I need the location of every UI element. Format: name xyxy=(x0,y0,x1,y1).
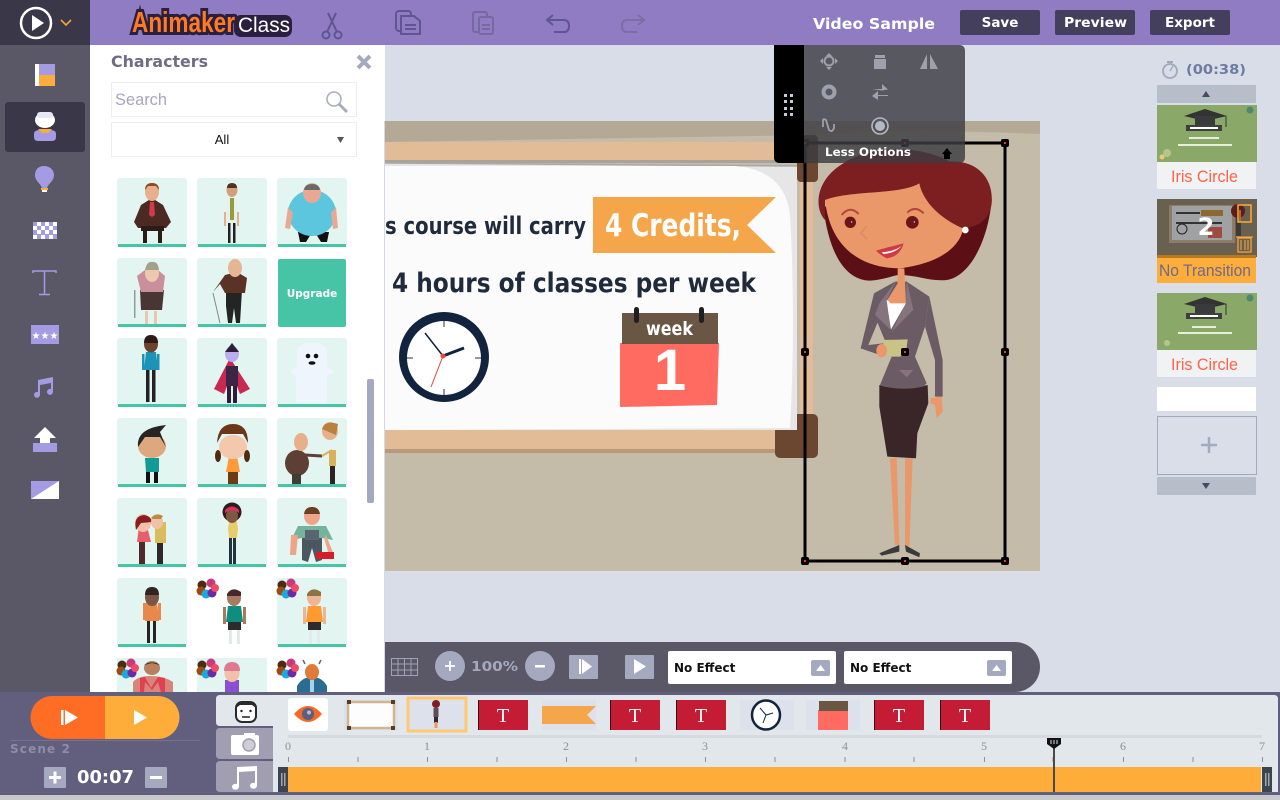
calendar: week xyxy=(646,318,693,340)
icon: collapse arrow xyxy=(942,148,952,159)
time ruler: 7 xyxy=(1259,739,1265,753)
scene label: Scene 2 xyxy=(10,742,70,756)
scroll down xyxy=(1157,477,1256,495)
icon: flip xyxy=(920,54,938,69)
icon: settings xyxy=(824,86,834,98)
clock xyxy=(399,312,489,402)
scene thumbnail 1: Iris Circle xyxy=(1171,168,1238,186)
time ruler: 5 xyxy=(981,739,987,753)
empty transition slot xyxy=(1157,387,1256,411)
duration control: 00:07 xyxy=(77,767,134,788)
character: boy in blue hoodie xyxy=(142,335,160,402)
icon: upload xyxy=(33,427,57,452)
icon: record xyxy=(872,118,888,134)
time ruler: 2 xyxy=(563,739,569,753)
duration control xyxy=(44,767,167,788)
orange ribbon: 4 Credits, xyxy=(605,208,741,244)
track item: text: T xyxy=(695,705,707,727)
total duration xyxy=(1163,61,1246,78)
save button xyxy=(960,10,1040,35)
character: man in brown suit xyxy=(134,183,171,243)
scene thumbnail 3: Iris Circle xyxy=(1171,356,1238,374)
character: large man in blue shirt xyxy=(285,183,338,242)
upgrade card xyxy=(278,259,346,327)
premium badges xyxy=(116,578,299,678)
character: girl with purple top xyxy=(224,662,240,692)
exit effect dropdown xyxy=(844,651,1012,684)
calendar xyxy=(620,307,719,407)
characters library panel xyxy=(90,45,385,692)
icon: characters xyxy=(34,112,56,141)
play button xyxy=(625,655,654,679)
icon: stars xyxy=(31,325,59,344)
canvas control bar xyxy=(385,642,1040,692)
Animaker Class logo: Animaker xyxy=(132,7,235,39)
export button xyxy=(1150,10,1230,35)
icon: swap xyxy=(872,84,888,100)
character: man in orange shirt xyxy=(143,587,161,643)
panel scrollbar xyxy=(367,379,374,503)
character: tall thin man xyxy=(224,183,239,243)
scene thumbnail 2 (active): No Transition xyxy=(1159,262,1251,280)
top bar xyxy=(0,0,1280,45)
close icon xyxy=(358,56,370,68)
object options toolbar xyxy=(774,45,965,163)
icon: delete xyxy=(874,55,886,69)
character: couple xyxy=(135,514,166,564)
export button: Export xyxy=(1165,15,1216,31)
time ruler: 1 xyxy=(424,739,430,753)
character: wrestler xyxy=(133,661,173,692)
icon: grid xyxy=(392,658,418,676)
character: woman with headband xyxy=(222,502,242,564)
icon: undo xyxy=(547,15,569,32)
white board xyxy=(385,163,797,430)
preview button: Preview xyxy=(1064,15,1127,31)
icon: redo xyxy=(622,15,644,32)
search box: Search xyxy=(115,91,167,109)
time ruler xyxy=(285,735,1265,762)
character: old man with cane xyxy=(213,259,247,323)
scene duration bar xyxy=(278,767,1272,792)
calendar: 1 xyxy=(654,338,686,403)
upgrade card: Upgrade xyxy=(287,288,337,300)
character: old woman xyxy=(134,262,165,324)
track item: ribbon xyxy=(542,700,596,730)
track item: text xyxy=(610,700,660,730)
character: mechanic with toolbox xyxy=(290,507,334,562)
zoom out button xyxy=(525,651,555,681)
play controls pill xyxy=(30,696,180,739)
panel heading: Characters xyxy=(111,52,208,71)
play scene button xyxy=(569,655,598,679)
enter effect dropdown: No Effect xyxy=(674,661,736,675)
preview button xyxy=(1055,10,1135,35)
track item: text xyxy=(874,700,924,730)
track item: text: T xyxy=(893,705,905,727)
category dropdown xyxy=(112,122,356,156)
zoom level: 100% xyxy=(471,659,519,675)
time ruler: 4 xyxy=(842,739,848,753)
track item: text: T xyxy=(497,705,509,727)
zoom in button xyxy=(435,651,465,681)
icon: effects checker xyxy=(33,222,57,239)
icon: text xyxy=(33,271,56,294)
character: vampire xyxy=(214,343,250,403)
track item: text: T xyxy=(629,705,641,727)
drag grip xyxy=(784,94,793,116)
total duration: (00:38) xyxy=(1186,62,1246,78)
character: fox in suit xyxy=(297,660,327,692)
scroll up xyxy=(1157,85,1256,103)
enter effect dropdown xyxy=(668,651,836,684)
icon: backgrounds xyxy=(35,64,55,86)
time ruler: 0 xyxy=(285,739,291,753)
video canvas scene xyxy=(385,121,1040,571)
time ruler: 3 xyxy=(702,739,708,753)
icon: move xyxy=(820,53,838,70)
icon: props bulb xyxy=(35,166,54,192)
category dropdown: All xyxy=(215,132,229,147)
timeline panel xyxy=(273,695,1278,792)
track item: board xyxy=(344,700,398,730)
character: green shirt runner xyxy=(223,589,246,644)
character: boy with spiky hair xyxy=(138,425,166,483)
time ruler: 6 xyxy=(1120,739,1126,753)
icon: stars: ★★★ xyxy=(32,331,58,342)
search box xyxy=(112,82,356,116)
icon: face tab xyxy=(236,701,256,722)
save button: Save xyxy=(982,15,1018,31)
timeline tabs xyxy=(216,695,273,792)
less options label: Less Options xyxy=(825,145,911,159)
character: orange shirt runner xyxy=(303,589,326,644)
scene thumbnail 3 xyxy=(1157,293,1257,377)
bottom timeline strip xyxy=(0,692,1280,800)
board heading: hours per week: 4 hours of classes per week xyxy=(392,268,757,299)
track item: calendar xyxy=(806,700,860,730)
track item: text xyxy=(676,700,726,730)
character cards xyxy=(117,178,347,692)
exit effect dropdown: No Effect xyxy=(850,661,912,675)
scene thumbnail 1 xyxy=(1157,105,1257,189)
board heading: course credits: s course will carry xyxy=(385,212,586,240)
add scene button xyxy=(1158,416,1256,474)
icon: music xyxy=(34,377,53,398)
icon: music tab xyxy=(232,766,257,790)
project title: Video Sample xyxy=(813,15,935,33)
character: girl with pigtails xyxy=(215,424,250,484)
track item: selected character xyxy=(408,698,466,731)
icon: cut xyxy=(322,13,342,38)
play logo block xyxy=(0,0,90,45)
icon: transition xyxy=(31,481,59,499)
track item: clock xyxy=(740,700,794,730)
Animaker Class logo: Class xyxy=(238,14,290,37)
selection frame with handles xyxy=(801,139,1009,565)
scene thumbnail 2 (active) xyxy=(1157,199,1257,283)
scene list xyxy=(1157,61,1257,495)
scene thumbnail 2 (active): 2 xyxy=(1198,213,1214,241)
icon: path xyxy=(823,119,834,131)
character: two men shaking hands xyxy=(285,422,338,484)
icon: paste xyxy=(473,12,493,34)
track item: text xyxy=(478,700,528,730)
track item: text: T xyxy=(959,705,971,727)
orange ribbon xyxy=(593,197,776,253)
track item: text xyxy=(940,700,990,730)
track item: eye xyxy=(288,698,328,731)
left tool sidebar xyxy=(0,45,90,692)
icon: copy xyxy=(396,11,420,34)
playhead xyxy=(1047,738,1061,792)
character: ghost xyxy=(290,343,334,403)
icon: camera tab xyxy=(231,733,259,755)
selected character: businesswoman xyxy=(818,149,992,557)
